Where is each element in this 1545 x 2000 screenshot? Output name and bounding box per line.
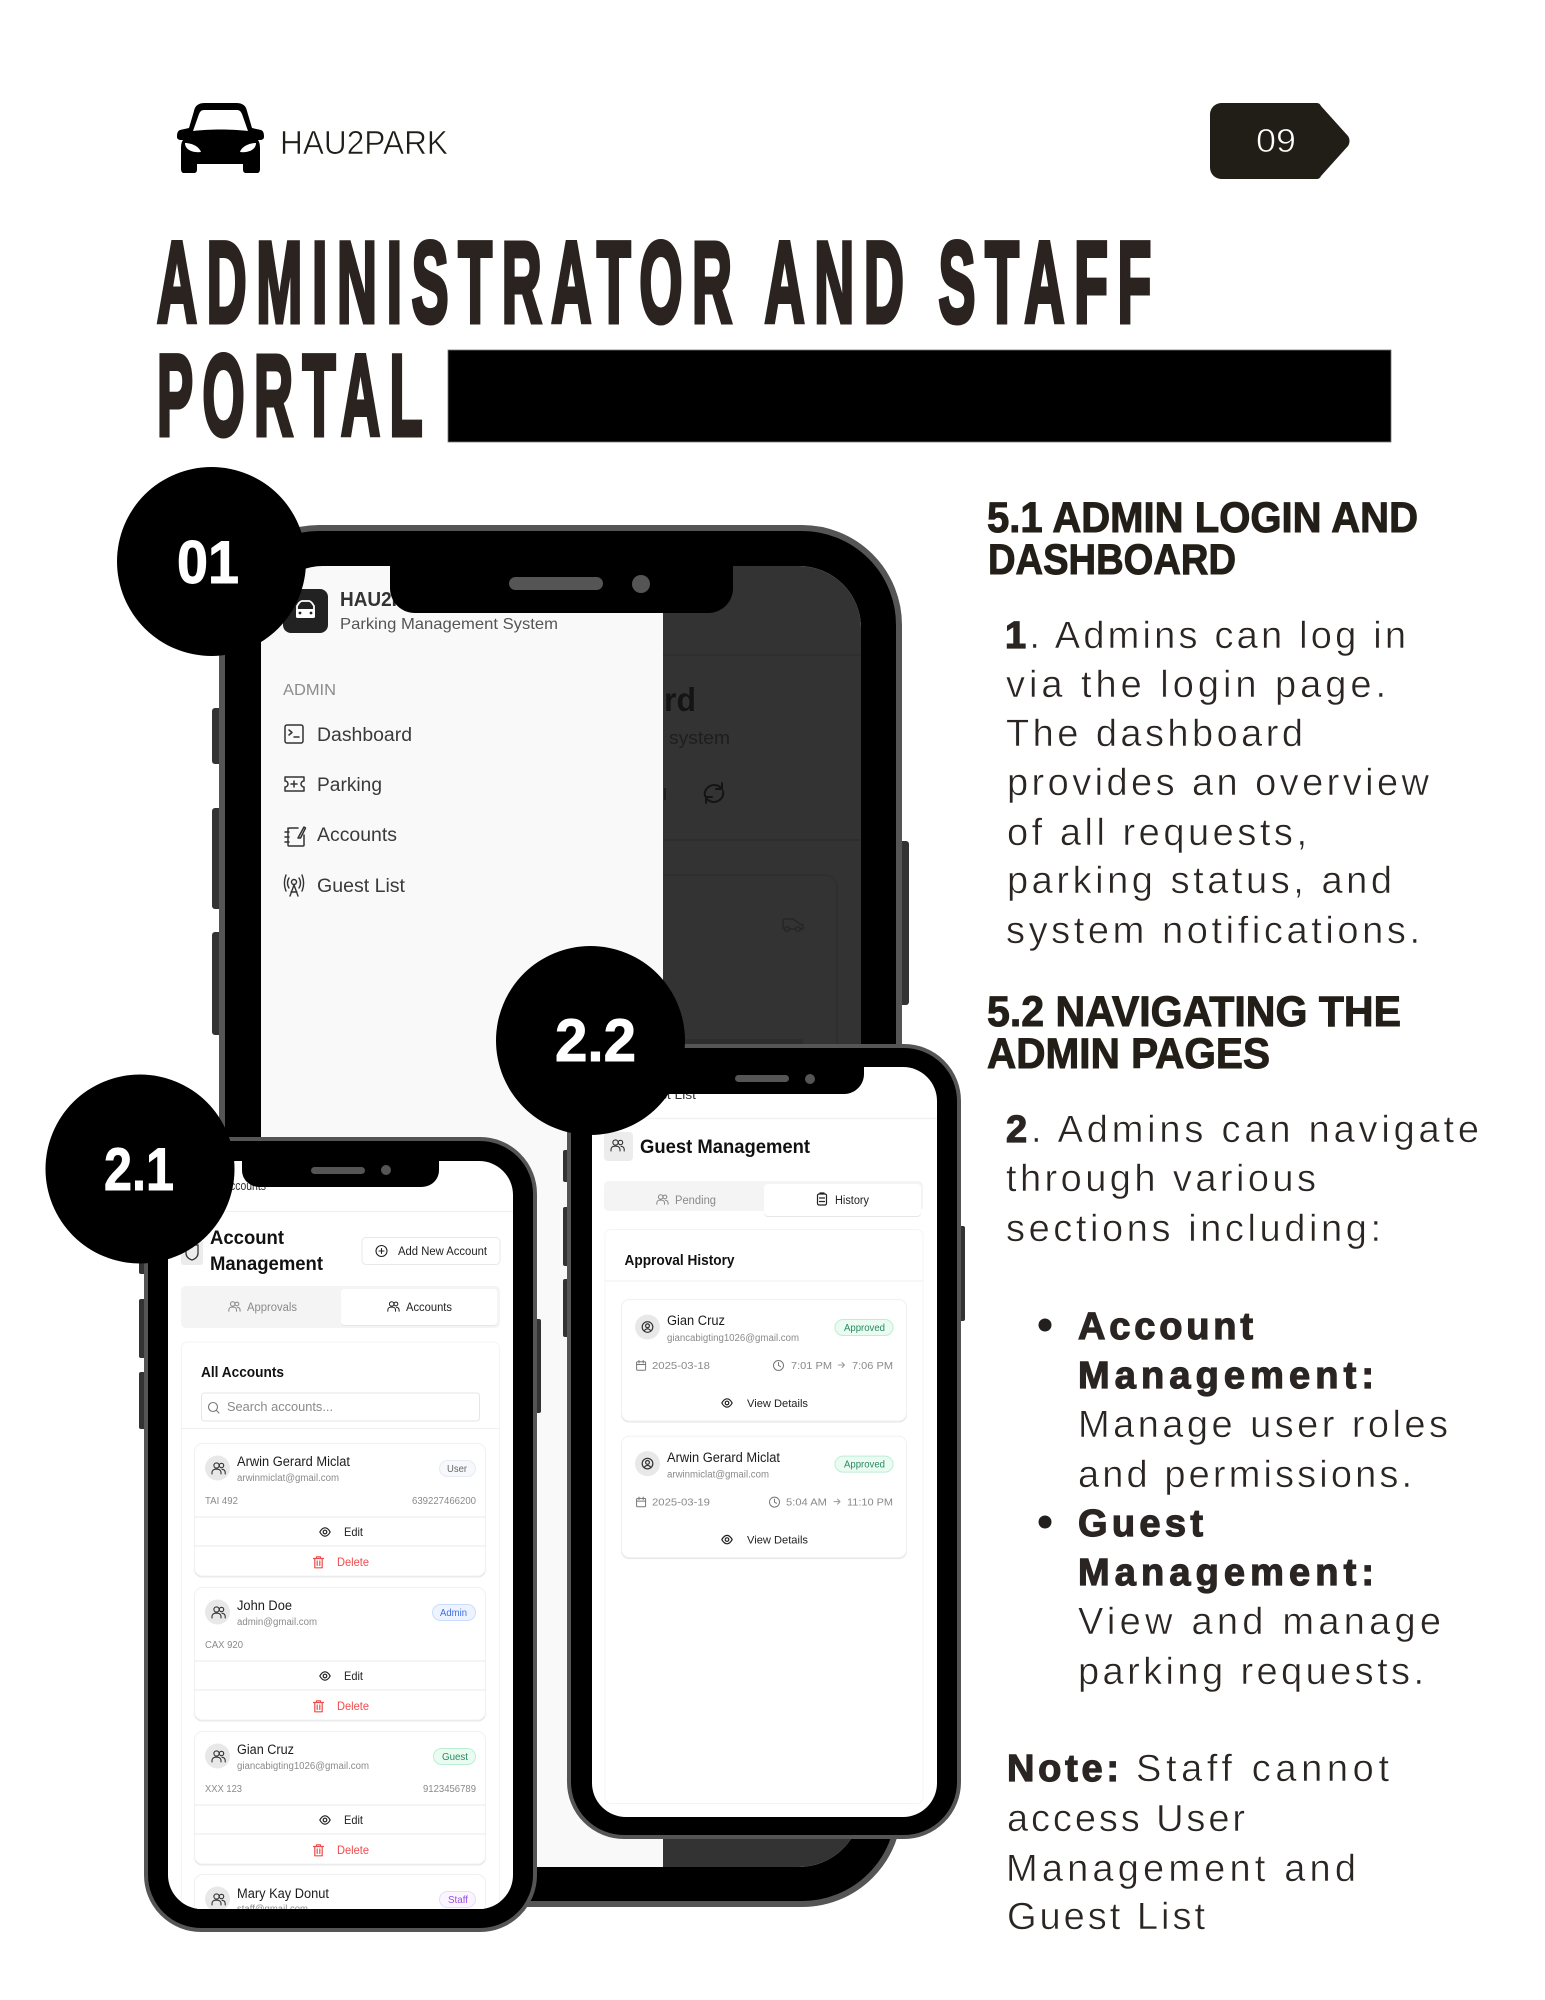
heading 5.2: 5.2 NAVIGATING THE [987,988,1401,1036]
bullet: guest management: Guest [1078,1503,1203,1545]
user card: Gian Cruz: Guest [442,1751,468,1763]
bullet: account management: Manage user roles [1078,1404,1448,1446]
heading 5.2: ADMIN PAGES [987,1030,1270,1078]
bullet: guest management: Management: [1078,1552,1374,1594]
paragraph 1: via the login page. [1006,664,1386,706]
user card: John Doe: Delete [337,1699,369,1713]
user card: Arwin Gerard Miclat: TAI 492 [205,1495,238,1507]
card heading: All Accounts [201,1364,284,1381]
guest record: Arwin Gerard Miclat [621,1436,907,1559]
speaker [735,1075,789,1082]
camera [632,575,650,593]
nav item: dashboard: Dashboard [317,725,412,746]
tabs [181,1286,500,1328]
nav item: parking: Parking [317,775,382,796]
number circle 01: 01 [177,529,239,596]
page number badge: 09 [1256,122,1296,159]
user card: Gian Cruz: XXX 123 [205,1783,242,1795]
speaker [311,1167,365,1174]
brand name: HAU2PARK [280,124,448,161]
number circle 2.2 [496,946,685,1135]
nav label: ADMIN [283,682,336,699]
guest record: Gian Cruz: 7:01 PM [791,1360,832,1372]
number circle 2.2: 2.2 [555,1007,636,1074]
tabs: Accounts [406,1302,452,1314]
user card: Gian Cruz: Gian Cruz [237,1742,294,1757]
phone frame [569,1046,959,1837]
icon tile [604,1132,633,1161]
heading: Guest Management [640,1136,810,1158]
tabs [604,1181,923,1217]
camera [381,1165,391,1175]
tabs: Pending [675,1195,716,1207]
paragraph 2: through various [1006,1158,1316,1200]
breadcrumb: st List [660,1087,696,1102]
speaker [509,577,603,590]
user card: John Doe: Admin [440,1607,467,1619]
number circle 2.1: 2.1 [104,1136,174,1203]
heading [210,1230,323,1274]
breadcrumb: ccounts [230,1178,266,1193]
user card: Arwin Gerard Miclat: Delete [337,1555,369,1569]
phone notch [390,566,733,613]
paragraph 1: The dashboard [1006,713,1303,755]
title: PORTAL [157,332,432,460]
bullet: account management: and permissions. [1078,1454,1412,1496]
user card: John Doe: Edit [344,1669,364,1683]
user card: Arwin Gerard Miclat: User [447,1463,467,1475]
guest record: Gian Cruz: Approved [844,1322,885,1334]
heading 5.1: DASHBOARD [988,536,1236,584]
bullet: account management [1038,1306,1448,1496]
guest record: Arwin Gerard Miclat: 2025-03-19 [652,1497,710,1509]
user card: Gian Cruz: Delete [337,1843,369,1857]
paragraph 1: system notifications. [1006,910,1420,952]
user card: Mary Kay Donut: Staff [448,1894,468,1906]
guest record: Gian Cruz: View Details [747,1398,809,1410]
number circle 2.1 [46,1074,234,1264]
phone frame [222,528,899,1904]
heading 5.1: 5.1 ADMIN LOGIN AND [987,494,1418,542]
phone notch [640,1067,864,1094]
screen [592,1067,937,1817]
card heading: Approval History [624,1252,735,1269]
guest record: Arwin Gerard Miclat: 5:04 AM [786,1497,827,1509]
paragraph 2: 2. Admins can navigate [1006,1109,1479,1151]
add new account button: Add New Account [398,1246,488,1258]
bullet list [1038,1306,1448,1693]
guest record: Gian Cruz: Gian Cruz [667,1313,725,1328]
dimmed dashboard side [663,566,861,1867]
phone notch [242,1161,439,1187]
shield icon tile [181,1240,203,1265]
screen [261,566,861,1867]
guest record: Arwin Gerard Miclat: Arwin Gerard Miclat [667,1450,780,1465]
number circle 01 [117,467,306,656]
dimmed dashboard side: rd [664,681,696,718]
user card: Mary Kay Donut: staff@gmail.com [237,1904,308,1915]
phone side buttons [563,1150,965,1337]
user card: Gian Cruz: giancabigting1026@gmail.com [237,1761,369,1772]
user card: John Doe [194,1588,486,1722]
paragraph 2: sections including: [1006,1208,1381,1250]
phone frame [146,1139,535,1930]
guest record: Gian Cruz [621,1300,907,1422]
user card: Arwin Gerard Miclat: arwinmiclat@gmail.com [237,1473,339,1484]
paragraph 1 [1005,615,1430,952]
user card: John Doe: John Doe [237,1598,292,1613]
user card: Arwin Gerard Miclat [194,1444,486,1578]
user card: Arwin Gerard Miclat: Arwin Gerard Miclat [237,1454,350,1469]
user card: John Doe: admin@gmail.com [237,1617,317,1628]
screen [168,1161,513,1909]
user card: Mary Kay Donut [194,1874,486,1909]
heading 5.1 [987,494,1418,584]
bullet: guest management: parking requests. [1078,1651,1424,1693]
paragraph 2 [1006,1109,1479,1250]
phone 2.1: account management [139,1139,541,2000]
paragraph 1: provides an overview [1007,762,1430,804]
user card: John Doe: CAX 920 [205,1639,243,1651]
phone side buttons [212,708,909,1035]
paragraph 1: parking status, and [1007,860,1392,902]
note: Management and [1006,1848,1356,1890]
app logo tile [283,589,328,633]
paragraph 1: 1. Admins can log in [1005,615,1406,657]
nav item: guest list: Guest List [317,876,406,897]
nav item: accounts: Accounts [317,825,397,846]
search box: Search accounts... [227,1400,333,1414]
user card: Gian Cruz: Edit [344,1813,364,1827]
title [157,219,1161,460]
note [1006,1748,1389,1938]
guest record: Arwin Gerard Miclat: 11:10 PM [847,1497,893,1509]
heading: Account [210,1227,284,1249]
camera [805,1074,815,1084]
add new account button [362,1238,500,1264]
guest record: Arwin Gerard Miclat: arwinmiclat@gmail.com [667,1470,769,1481]
guest record: Gian Cruz: giancabigting1026@gmail.com [667,1333,799,1344]
guest record: Gian Cruz: 7:06 PM [852,1360,893,1372]
guest record: Arwin Gerard Miclat: Approved [844,1459,885,1471]
app name: HAU2PARK [340,589,445,611]
title black bar [448,350,1391,442]
bullet: guest management [1038,1503,1441,1693]
nav item: accounts [285,825,397,846]
user card: Arwin Gerard Miclat: Edit [344,1525,364,1539]
phone 01: admin dashboard [212,528,909,1904]
user card: Arwin Gerard Miclat: 639227466200 [412,1495,476,1507]
guest record: Gian Cruz: 2025-03-18 [652,1360,710,1372]
tabs: Approvals [247,1302,297,1314]
paragraph 1: of all requests, [1007,812,1307,854]
heading: Management [210,1253,323,1275]
bullet: account management: Management: [1078,1355,1374,1397]
note: access User [1007,1798,1245,1840]
user card: Gian Cruz [194,1732,486,1866]
heading 5.2 [987,988,1401,1078]
bullet: account management: Account [1078,1306,1253,1348]
dimmed dashboard side: system [669,728,730,748]
nav item: guest list [284,875,406,897]
tabs: History [835,1195,869,1207]
app subtitle: Parking Management System [340,616,558,633]
logo: car icon [177,103,264,173]
approval history card [605,1230,923,1804]
phone 2.2: guest management [563,1046,965,1837]
user card: Mary Kay Donut: Mary Kay Donut [237,1886,329,1901]
user card: Gian Cruz: 9123456789 [423,1783,476,1795]
page number badge [1210,103,1350,179]
search box [202,1393,480,1421]
phone side buttons [139,1225,541,1429]
note: Note: [1007,1748,1119,1790]
note: Guest List [1007,1896,1205,1938]
nav item: parking [285,775,382,796]
accounts card [181,1342,500,1909]
guest record: Arwin Gerard Miclat: View Details [747,1535,809,1547]
note: Staff cannot [1136,1748,1389,1790]
bullet: guest management: View and manage [1078,1601,1441,1643]
